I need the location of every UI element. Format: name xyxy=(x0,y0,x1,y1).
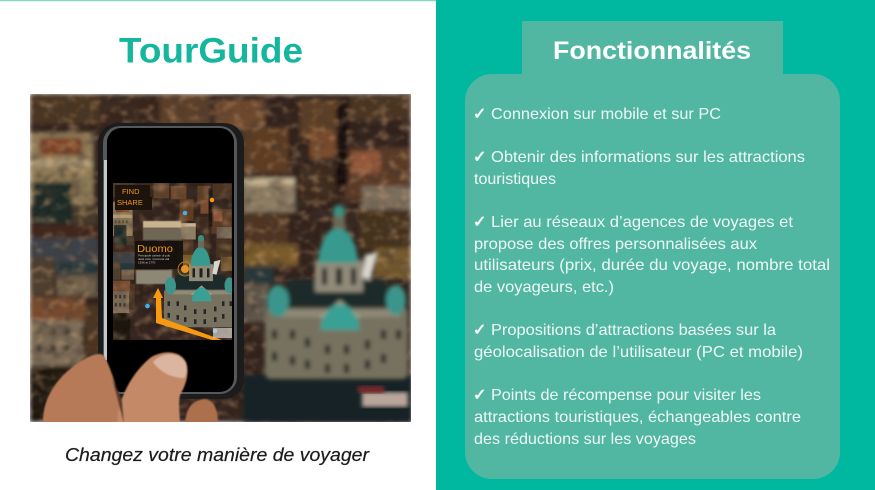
feature: agences xyxy=(473,212,830,296)
screen buttons: FIND xyxy=(122,187,140,196)
hand xyxy=(43,352,218,424)
top accent line xyxy=(0,0,436,1)
feature: informations: ✓ xyxy=(473,147,486,166)
orange arrow xyxy=(153,288,222,340)
feature: connexion: ✓ xyxy=(473,104,486,123)
panel: features xyxy=(465,21,840,479)
feature: informations: Obtenir des informations sur les attractions xyxy=(491,149,805,166)
feature: propositions: géolocalisation de l’utilisateur (PC et mobile) xyxy=(474,344,803,361)
phone xyxy=(98,123,244,399)
target marker xyxy=(178,262,192,276)
Duomo callout xyxy=(135,241,183,269)
Duomo callout: Duomo xyxy=(137,243,173,255)
screen buttons: SHARE xyxy=(117,198,143,207)
feature: agences: Lier au réseaux d’agences de voyages et xyxy=(491,214,794,231)
feature: agences: ✓ xyxy=(473,212,486,231)
Duomo callout: della citta. Costruita dal xyxy=(138,257,170,261)
feature: recompenses: Points de récompense pour visiter les xyxy=(491,387,761,404)
right panel background xyxy=(436,0,875,490)
photo: phone held over city xyxy=(30,94,411,424)
feature: recompenses: des réductions sur les voyages xyxy=(474,431,696,448)
feature: agences: utilisateurs (prix, durée du voyage, nombre total xyxy=(474,257,830,274)
feature: propositions: Propositions d’attractions basées sur la xyxy=(491,322,776,339)
feature: agences: propose des offres personnalisées aux xyxy=(474,236,757,253)
phone screen xyxy=(113,183,236,340)
feature: recompenses: attractions touristiques, échangeables contre xyxy=(474,409,801,426)
feature card xyxy=(465,74,840,479)
feature: informations xyxy=(473,147,805,188)
heading tab: Fonctionnalités xyxy=(553,37,751,65)
feature: connexion: Connexion sur mobile et sur PC xyxy=(491,106,721,123)
feature: propositions: ✓ xyxy=(473,320,486,339)
title: TourGuide xyxy=(119,32,303,70)
Duomo callout: 1396 al 1770 xyxy=(138,260,156,264)
left panel background xyxy=(0,0,436,490)
heading tab xyxy=(522,21,783,81)
Duomo callout: Principale cattedr di pub xyxy=(138,254,171,258)
feature: recompenses xyxy=(473,385,801,448)
screen buttons xyxy=(115,185,152,210)
feature: informations: touristiques xyxy=(474,171,556,188)
feature: recompenses: ✓ xyxy=(473,385,486,404)
blurred city background xyxy=(30,94,411,422)
tagline: Changez votre manière de voyager xyxy=(65,444,370,465)
map pins xyxy=(145,198,217,333)
feature: agences: de voyageurs, etc.) xyxy=(474,279,614,296)
feature: propositions xyxy=(473,320,803,361)
